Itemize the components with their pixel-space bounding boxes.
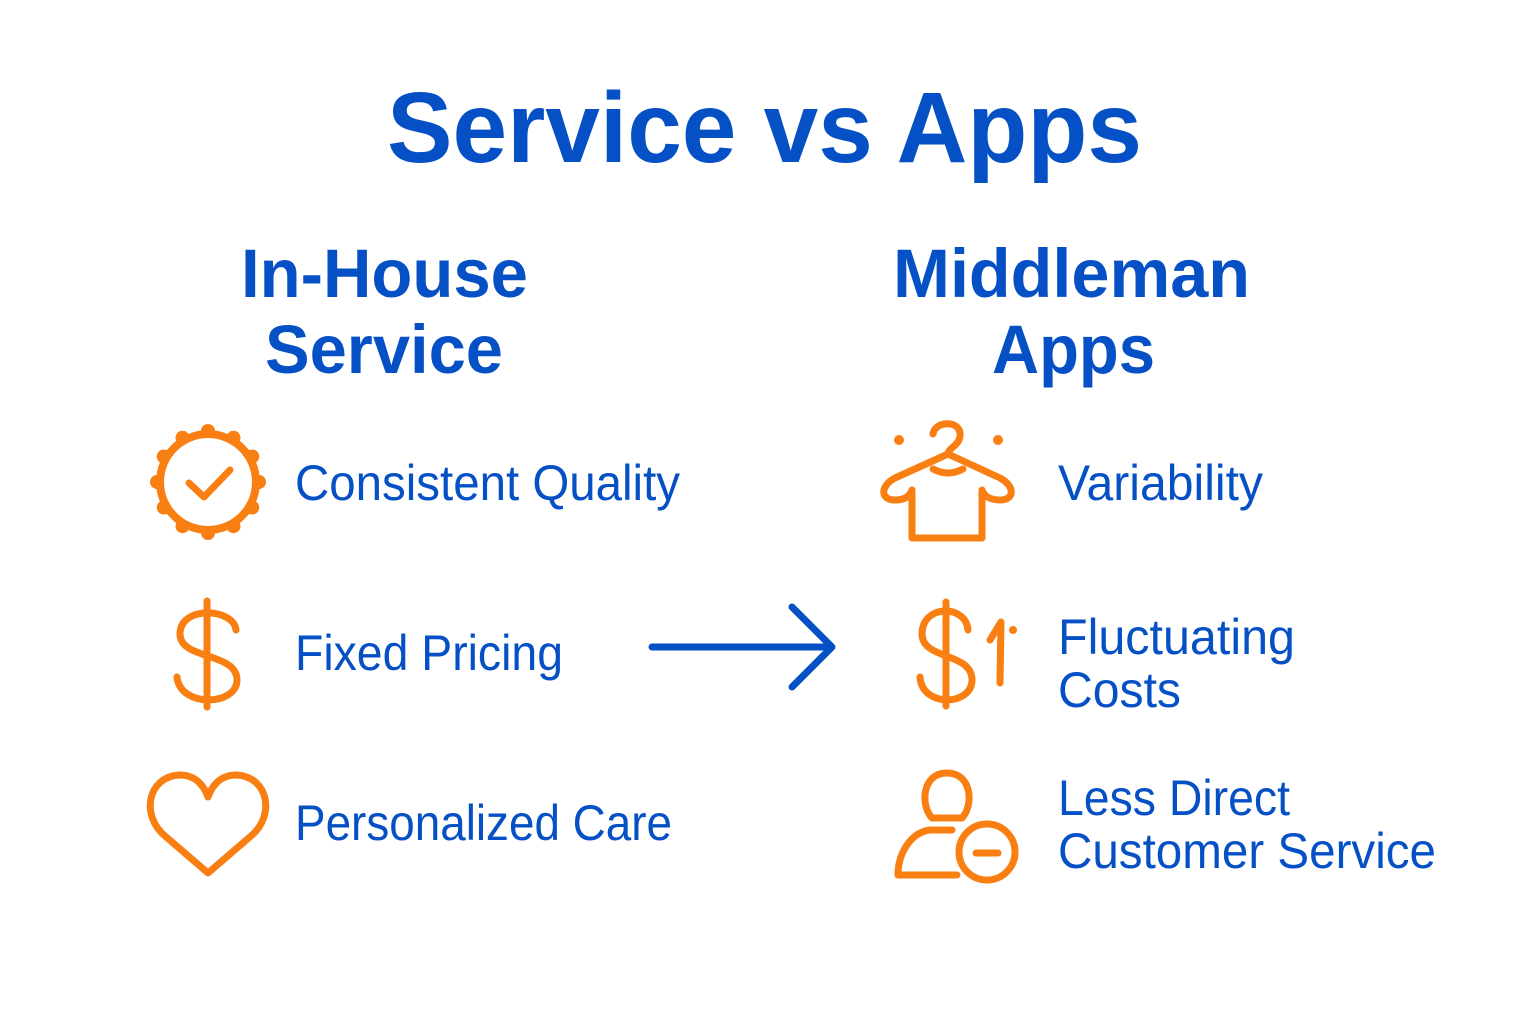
icon: hanger shirt — [884, 424, 1011, 538]
heading: in-house service: In-House — [241, 235, 528, 312]
text: personalized care: Personalized Care — [295, 795, 672, 851]
title: Service vs Apps — [387, 72, 1142, 184]
text: less direct customer service — [1058, 770, 1436, 879]
text: consistent quality: Consistent Quality — [295, 455, 680, 511]
text: fluctuating costs: Costs — [1058, 662, 1181, 718]
text: less direct customer service: Less Direct — [1058, 770, 1290, 826]
heading: middleman apps — [893, 235, 1250, 388]
text: fluctuating costs: Fluctuating — [1058, 609, 1295, 665]
arrow — [652, 607, 832, 687]
icon: heart — [150, 775, 266, 873]
text: fixed pricing: Fixed Pricing — [295, 625, 563, 681]
text: fluctuating costs — [1058, 609, 1295, 718]
text: less direct customer service: Customer Service — [1058, 823, 1436, 879]
heading: middleman apps: Apps — [992, 311, 1155, 388]
text: variability: Variability — [1058, 455, 1263, 511]
heading: middleman apps: Middleman — [893, 235, 1250, 312]
icon: dollar with up arrow — [920, 602, 1017, 706]
icon: quality badge — [150, 424, 266, 540]
heading: in-house service: Service — [265, 311, 503, 388]
icon: dollar — [177, 601, 237, 707]
icon: user minus — [898, 773, 1015, 880]
heading: in-house service — [241, 235, 528, 388]
